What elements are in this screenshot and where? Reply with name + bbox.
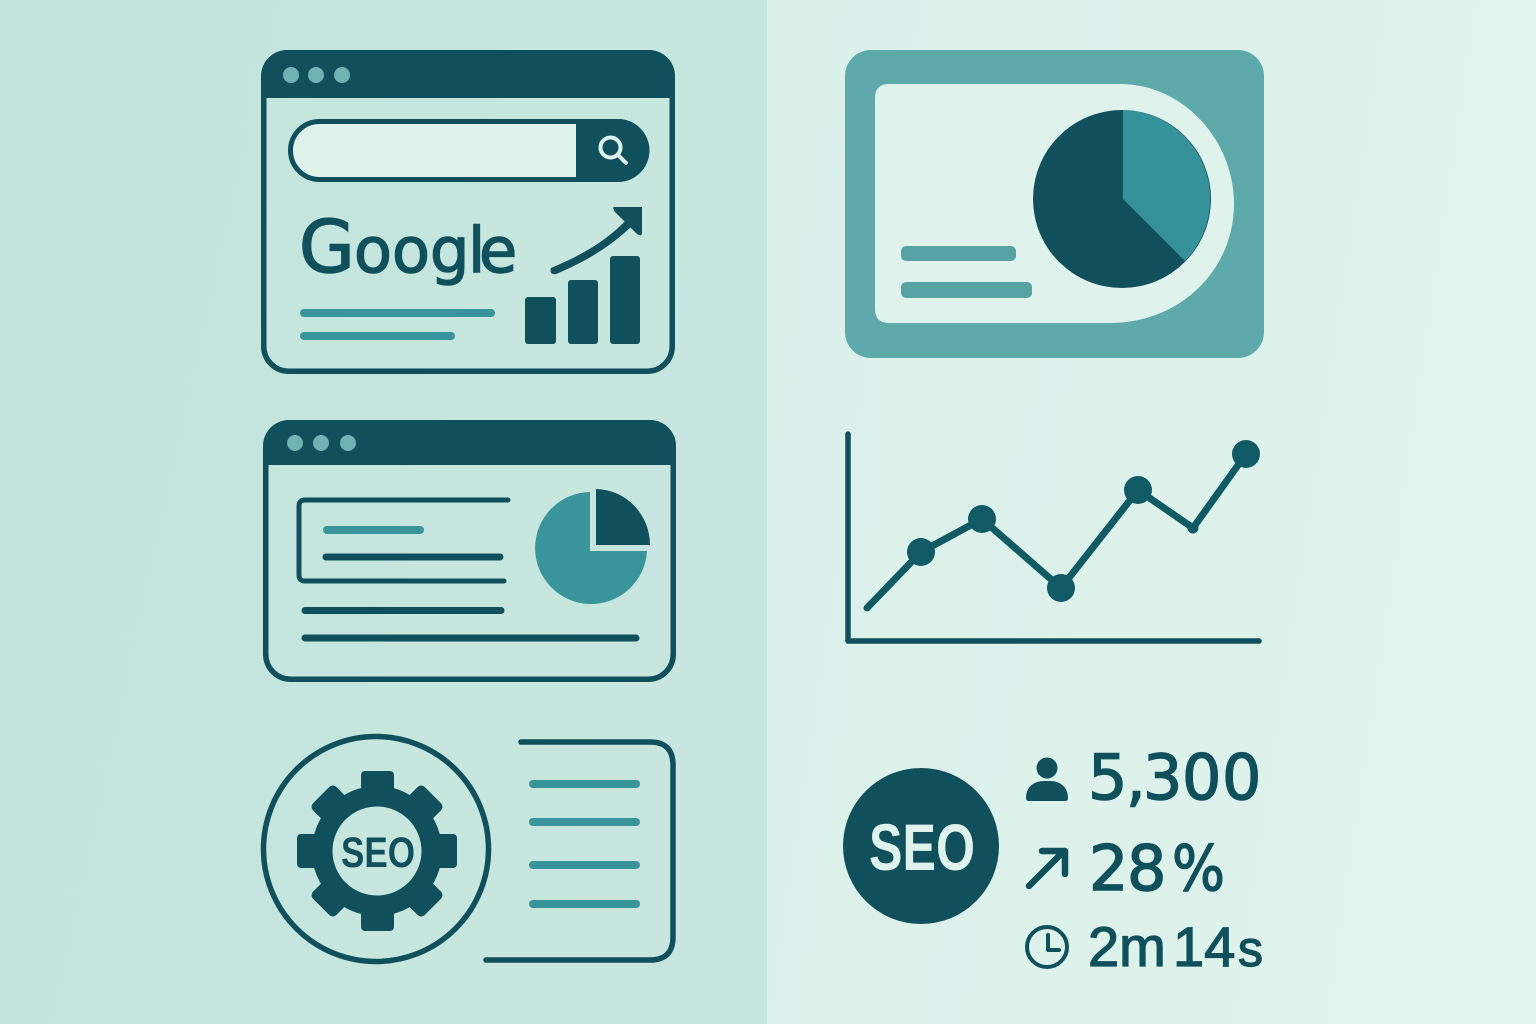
SEO badge: SEO	[869, 810, 975, 884]
SEO badge	[843, 768, 999, 924]
data line	[867, 454, 1246, 608]
pie chart	[535, 489, 650, 604]
icon: gear	[297, 771, 457, 931]
pie chart	[1033, 110, 1211, 288]
card background	[845, 50, 1264, 358]
icon: magnifier	[600, 138, 626, 163]
Google wordmark: e	[479, 214, 517, 287]
axes	[848, 434, 1259, 641]
growth arrow	[551, 207, 642, 274]
growth value: %	[1172, 832, 1225, 905]
growth value	[1089, 832, 1225, 905]
time value: 14	[1173, 915, 1235, 978]
visitors value: 5,300	[1088, 741, 1261, 814]
window dots	[283, 67, 350, 83]
bar chart	[525, 256, 640, 344]
browser title bar	[261, 50, 675, 98]
panel: right background	[767, 0, 1536, 1024]
panel: Google search browser window	[261, 50, 675, 371]
panel: web page with pie chart	[263, 420, 676, 679]
icon: clock	[1027, 927, 1067, 967]
browser frame	[266, 423, 673, 679]
line chart	[848, 434, 1260, 641]
data points	[907, 440, 1260, 602]
Google wordmark: o	[354, 214, 392, 287]
circle outline	[264, 736, 488, 962]
icon: up arrow	[1029, 851, 1065, 886]
document outline	[486, 742, 673, 960]
growth value: 28	[1089, 832, 1166, 905]
search bar	[290, 119, 650, 182]
time value: s	[1238, 921, 1263, 977]
time value: 2m	[1088, 915, 1166, 978]
checklist lines	[529, 780, 640, 908]
panel: SEO gear and checklist	[264, 736, 673, 962]
card inner shape	[875, 84, 1234, 323]
icon: person	[1026, 758, 1068, 801]
text lines	[300, 309, 495, 340]
Google wordmark: l	[468, 214, 485, 287]
panel: left background	[0, 0, 767, 1024]
Google wordmark: G	[299, 205, 355, 289]
panel: pie chart card	[845, 50, 1264, 358]
browser frame	[264, 53, 672, 371]
window dots	[287, 435, 356, 451]
Google wordmark: g	[430, 214, 469, 287]
Google wordmark: o	[392, 214, 430, 287]
text bars	[901, 246, 1032, 298]
panel: SEO metrics	[843, 741, 1263, 978]
browser title bar	[263, 420, 676, 465]
gear label: SEO	[341, 829, 415, 877]
text lines	[305, 530, 636, 638]
text block frame	[299, 500, 508, 581]
